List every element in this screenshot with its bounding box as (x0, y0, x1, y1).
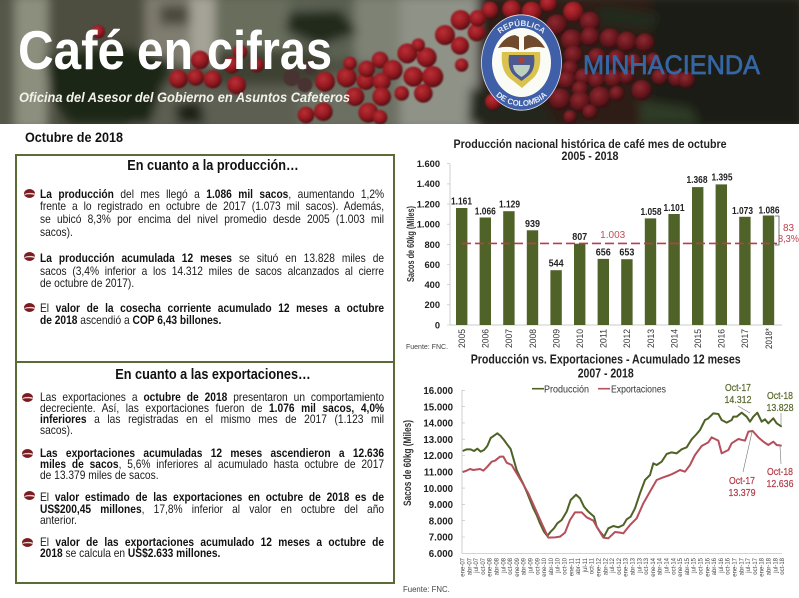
bullet text: producción mensual: La producción del mes llegó a 1.086 mil sacos, aumentando 1,2% (40, 188, 384, 200)
title: Café en cifras: Café (18, 19, 125, 81)
x axis months: jul-18 (773, 557, 779, 574)
x axis months: jul-15 (692, 557, 698, 574)
bar values: 544 (549, 259, 564, 270)
x axis years: 2008 (528, 329, 539, 348)
x axis months: ene-13 (624, 557, 630, 577)
heading: producción: En cuanto a la producción… (127, 158, 299, 174)
chart title: 2007 - 2018 (578, 366, 634, 380)
x axis months: jul-08 (501, 557, 507, 574)
x axis months: jul-12 (610, 557, 616, 574)
x axis months: abr-16 (712, 557, 718, 575)
x axis months: jul-10 (556, 557, 562, 574)
x axis years: 2007 (504, 329, 515, 348)
x axis months: ene-14 (651, 557, 657, 577)
bullet text: producción mensual: sacos). (40, 226, 73, 239)
line: producción (463, 413, 782, 537)
x axis months: abr-12 (603, 557, 609, 575)
bar values: 1.058 (640, 207, 662, 218)
icon: bean bullets (22, 189, 35, 547)
bullet text: producción acumulada: La producción acumulada 12 meses se situó en 13.828 miles de (40, 252, 384, 265)
bullet text: valor acumulado (40, 536, 384, 560)
logo: escudo República de Colombia (481, 14, 562, 111)
x axis months: oct-09 (535, 557, 541, 575)
x axis months: ene-09 (515, 557, 521, 577)
bullet text: valor estimado (40, 491, 384, 527)
berries (92, 0, 695, 125)
y axis: 13.000 (423, 435, 453, 446)
y axis (423, 386, 782, 560)
x axis months: oct-08 (508, 557, 514, 575)
annotation: producción oct-17: Oct-17 (725, 382, 751, 394)
y axis title: Sacos de 60kg (Miles) (405, 206, 417, 282)
logo: escudo República de Colombia: DE COLOMBIA (496, 92, 548, 106)
bar values: 807 (572, 232, 588, 243)
bullet text: producción mensual (40, 188, 384, 239)
x axis years: 2006 (481, 329, 492, 348)
bullet text: exportaciones del mes (40, 390, 384, 437)
bullet text: exportaciones del mes: decreciente. Así, las exportaciones fueron de 1.076 mil sacos, 4,0% (40, 402, 384, 415)
x axis years: 2009 (551, 329, 562, 348)
x axis months: ene-16 (705, 557, 711, 577)
bullet text: exportaciones del mes: Las exportaciones a octubre de 2018 presentaron un comportamiento (40, 390, 384, 404)
bar values: 1.161 (451, 196, 472, 208)
x axis months (460, 557, 786, 577)
annotation: exportaciones oct-17 (728, 475, 756, 499)
bar values: 1.368 (686, 175, 708, 186)
x axis months: abr-17 (739, 557, 745, 575)
title: Café en cifras (18, 19, 332, 81)
x axis months: oct-11 (590, 557, 596, 574)
bullet text: producción acumulada: de octubre de 2017). (40, 277, 134, 290)
x axis months: abr-11 (576, 557, 582, 575)
y axis: 1.600 (417, 159, 440, 169)
source note: Fuente: FNC. (403, 585, 450, 594)
x axis months: abr-09 (522, 557, 528, 575)
bullet text: producción acumulada: sacos (3,4% inferior a los 14.312 miles de sacos alcanzados al cierre (40, 265, 384, 278)
x axis years: 2015 (693, 329, 704, 348)
chart title (454, 137, 727, 163)
average line (462, 242, 777, 244)
x axis months: jul-07 (474, 557, 480, 574)
series lines (463, 413, 782, 538)
x axis months: oct-10 (562, 557, 568, 575)
y axis: 600 (424, 260, 440, 270)
bullet text: valor acumulado: El valor de las exportaciones acumulado 12 meses a octubre de (40, 536, 384, 549)
bar values: 656 (596, 247, 611, 258)
x axis months: ene-08 (488, 557, 494, 577)
y axis (417, 159, 782, 330)
y axis: 8.000 (429, 516, 453, 527)
average label: 1.003 (600, 230, 626, 241)
x axis months: ene-12 (596, 557, 602, 577)
y axis: 800 (424, 240, 440, 250)
y axis: 1.400 (417, 179, 440, 189)
x axis months: oct-12 (617, 557, 623, 575)
bullet text: valor estimado: El valor estimado de las exportaciones en octubre de 2018 es de (40, 491, 384, 504)
y axis: 15.000 (423, 402, 453, 413)
bullet text: valor estimado: anterior. (40, 514, 77, 527)
annotation leaders (738, 406, 781, 472)
bullet text: producción mensual: frente a lo registrado en octubre de 2017 (1.073 mil sacos). Además, (40, 200, 384, 213)
annotation: exportaciones oct-17: Oct-17 (729, 475, 755, 487)
logo: escudo República de Colombia: REPÚBLICA (497, 19, 544, 34)
x axis months: abr-13 (630, 557, 636, 575)
x axis months: jul-13 (637, 557, 643, 574)
x axis years (457, 328, 775, 349)
difference bracket: 83 (783, 223, 795, 234)
annotation: producción oct-18: Oct-18 (767, 390, 793, 402)
x axis months: oct-16 (726, 557, 732, 575)
line chart: producción vs exportaciones (402, 352, 794, 594)
legend: Exportaciones (611, 384, 666, 396)
bullet text: valor de la cosecha: El valor de la cosecha corriente acumulado 12 meses a octubre (40, 302, 384, 314)
bar values: 939 (525, 219, 540, 230)
legend (532, 384, 666, 396)
bar values: 1.066 (475, 206, 496, 218)
bars (456, 184, 774, 325)
y axis: 7.000 (429, 533, 453, 544)
logo text: MINHACIENDA: MINHACIENDA (583, 50, 760, 80)
x axis years: 2005 (457, 329, 468, 348)
y axis: 14.000 (423, 419, 453, 430)
x axis years: 2013 (646, 329, 657, 348)
bullet text: exportaciones acumuladas: Las exportaciones acumuladas 12 meses ascendieron a 12.636 (40, 447, 384, 460)
chart title (471, 352, 741, 380)
y axis: 1.000 (417, 220, 440, 230)
x axis months: ene-17 (732, 557, 738, 577)
subtitle: Oficina del Asesor del Gobierno en Asuntos Cafeteros (19, 89, 350, 105)
bullet text: valor de la cosecha (40, 302, 384, 327)
x axis months: jul-14 (664, 557, 670, 574)
x axis months: abr-07 (467, 557, 473, 575)
x axis years: 2010 (575, 329, 586, 348)
x axis years: 2017 (740, 329, 751, 348)
x axis months: ene-10 (542, 557, 548, 577)
bar values: 1.086 (758, 206, 780, 216)
bar values (451, 172, 780, 270)
title: Café en cifras: en (137, 19, 193, 81)
y axis: 400 (424, 280, 440, 290)
x axis months: jul-16 (719, 557, 725, 574)
x axis months: ene-15 (678, 557, 684, 577)
heading: exportaciones: En cuanto a las exportaciones… (115, 367, 311, 383)
title: Café en cifras: cifras (207, 19, 332, 81)
annotation: producción oct-18 (766, 390, 794, 414)
panel: exportaciones (15, 360, 395, 584)
bullet text: exportaciones acumuladas: miles de sacos, 5,6% inferiores al acumulado hasta octubre de 2017 (40, 458, 384, 471)
x axis months: ene-11 (569, 557, 575, 576)
annotation: exportaciones oct-17: 13.379 (728, 487, 756, 499)
difference bracket (775, 216, 799, 245)
bullet text: exportaciones del mes: inferiores a las registradas en el mismo mes de 2017 (1.123 mil (40, 413, 384, 426)
bar values: 1.395 (712, 172, 733, 184)
annotation: exportaciones oct-18: Oct-18 (767, 466, 793, 478)
y axis: 1.200 (417, 200, 440, 210)
x axis years: 2012 (622, 329, 633, 348)
annotation: producción oct-18: 13.828 (766, 402, 794, 414)
y axis title: Sacos de 60kg (Miles) (402, 420, 414, 506)
y axis: 11.000 (424, 468, 453, 478)
bar values: 1.129 (499, 200, 520, 211)
x axis months: oct-15 (698, 557, 704, 575)
bullet text: valor acumulado: 2018 se calcula en US$2.633 millones. (40, 547, 220, 560)
annotation: producción oct-17: 14.312 (724, 394, 752, 406)
x axis months: oct-07 (481, 557, 487, 575)
bar chart: producción octubre (405, 137, 799, 351)
bar values: 653 (619, 248, 635, 259)
chart title: Producción vs. Exportaciones - Acumulado 12 meses (471, 352, 741, 366)
panel: producción (15, 154, 395, 362)
x axis months: ene-18 (760, 557, 766, 577)
y axis: 200 (424, 300, 440, 310)
bullet text: exportaciones acumuladas: de 13.379 miles de sacos. (40, 469, 159, 482)
line: exportaciones (463, 431, 782, 538)
y axis: 6.000 (429, 549, 453, 560)
x axis years: 2016 (717, 329, 728, 348)
bullet text: exportaciones del mes: sacos). (40, 424, 73, 437)
chart title: Producción nacional histórica de café mes de octubre (454, 137, 727, 151)
x axis months: abr-14 (658, 557, 664, 575)
x axis months: jul-17 (746, 557, 752, 574)
y axis: 12.000 (423, 451, 453, 462)
x axis months: oct-14 (671, 557, 677, 575)
photo background: coffee branch (0, 0, 799, 130)
x axis months: abr-18 (766, 557, 772, 575)
annotation: exportaciones oct-18: 12.636 (766, 478, 794, 490)
legend: Producción (544, 384, 589, 396)
bullet text: producción mensual: se ubicó 8,3% por encima del nivel promedio desde 2005 (1.003 mil (40, 213, 384, 226)
x axis months: ene-07 (460, 557, 466, 577)
chart title: 2005 - 2018 (562, 149, 619, 163)
bar values: 1.073 (732, 206, 753, 217)
x axis months: abr-15 (685, 557, 691, 575)
bullet text: valor de la cosecha: de 2018 ascendió a COP 6,43 billones. (40, 314, 221, 327)
x axis months: jul-09 (528, 557, 534, 574)
y axis: 10.000 (423, 484, 453, 495)
x axis months: abr-10 (549, 557, 555, 575)
y axis: 16.000 (423, 386, 453, 397)
annotation: exportaciones oct-18 (766, 466, 794, 490)
x axis months: oct-17 (753, 557, 759, 575)
bullet text: valor estimado: US$200,45 millones, 17,8% inferior al valor en octubre del año (40, 502, 384, 516)
bar values: 1.101 (664, 203, 685, 214)
header banner (0, 0, 799, 124)
x axis months: oct-13 (644, 557, 650, 575)
annotation: producción oct-17 (724, 382, 752, 406)
date heading: Octubre de 2018 (25, 129, 123, 145)
x axis years: 2011 (599, 329, 610, 348)
x axis months: oct-18 (780, 557, 786, 575)
bullet text: exportaciones acumuladas (40, 447, 384, 482)
x axis years: 2014 (669, 329, 680, 348)
source note: Fuente: FNC. (406, 344, 448, 351)
x axis months: jul-11 (583, 557, 589, 573)
y axis: 0 (435, 320, 440, 330)
y axis: 9.000 (429, 500, 453, 511)
x axis months: abr-08 (494, 557, 500, 575)
bullet text: producción acumulada (40, 252, 384, 290)
x axis years: 2018* (764, 328, 775, 349)
